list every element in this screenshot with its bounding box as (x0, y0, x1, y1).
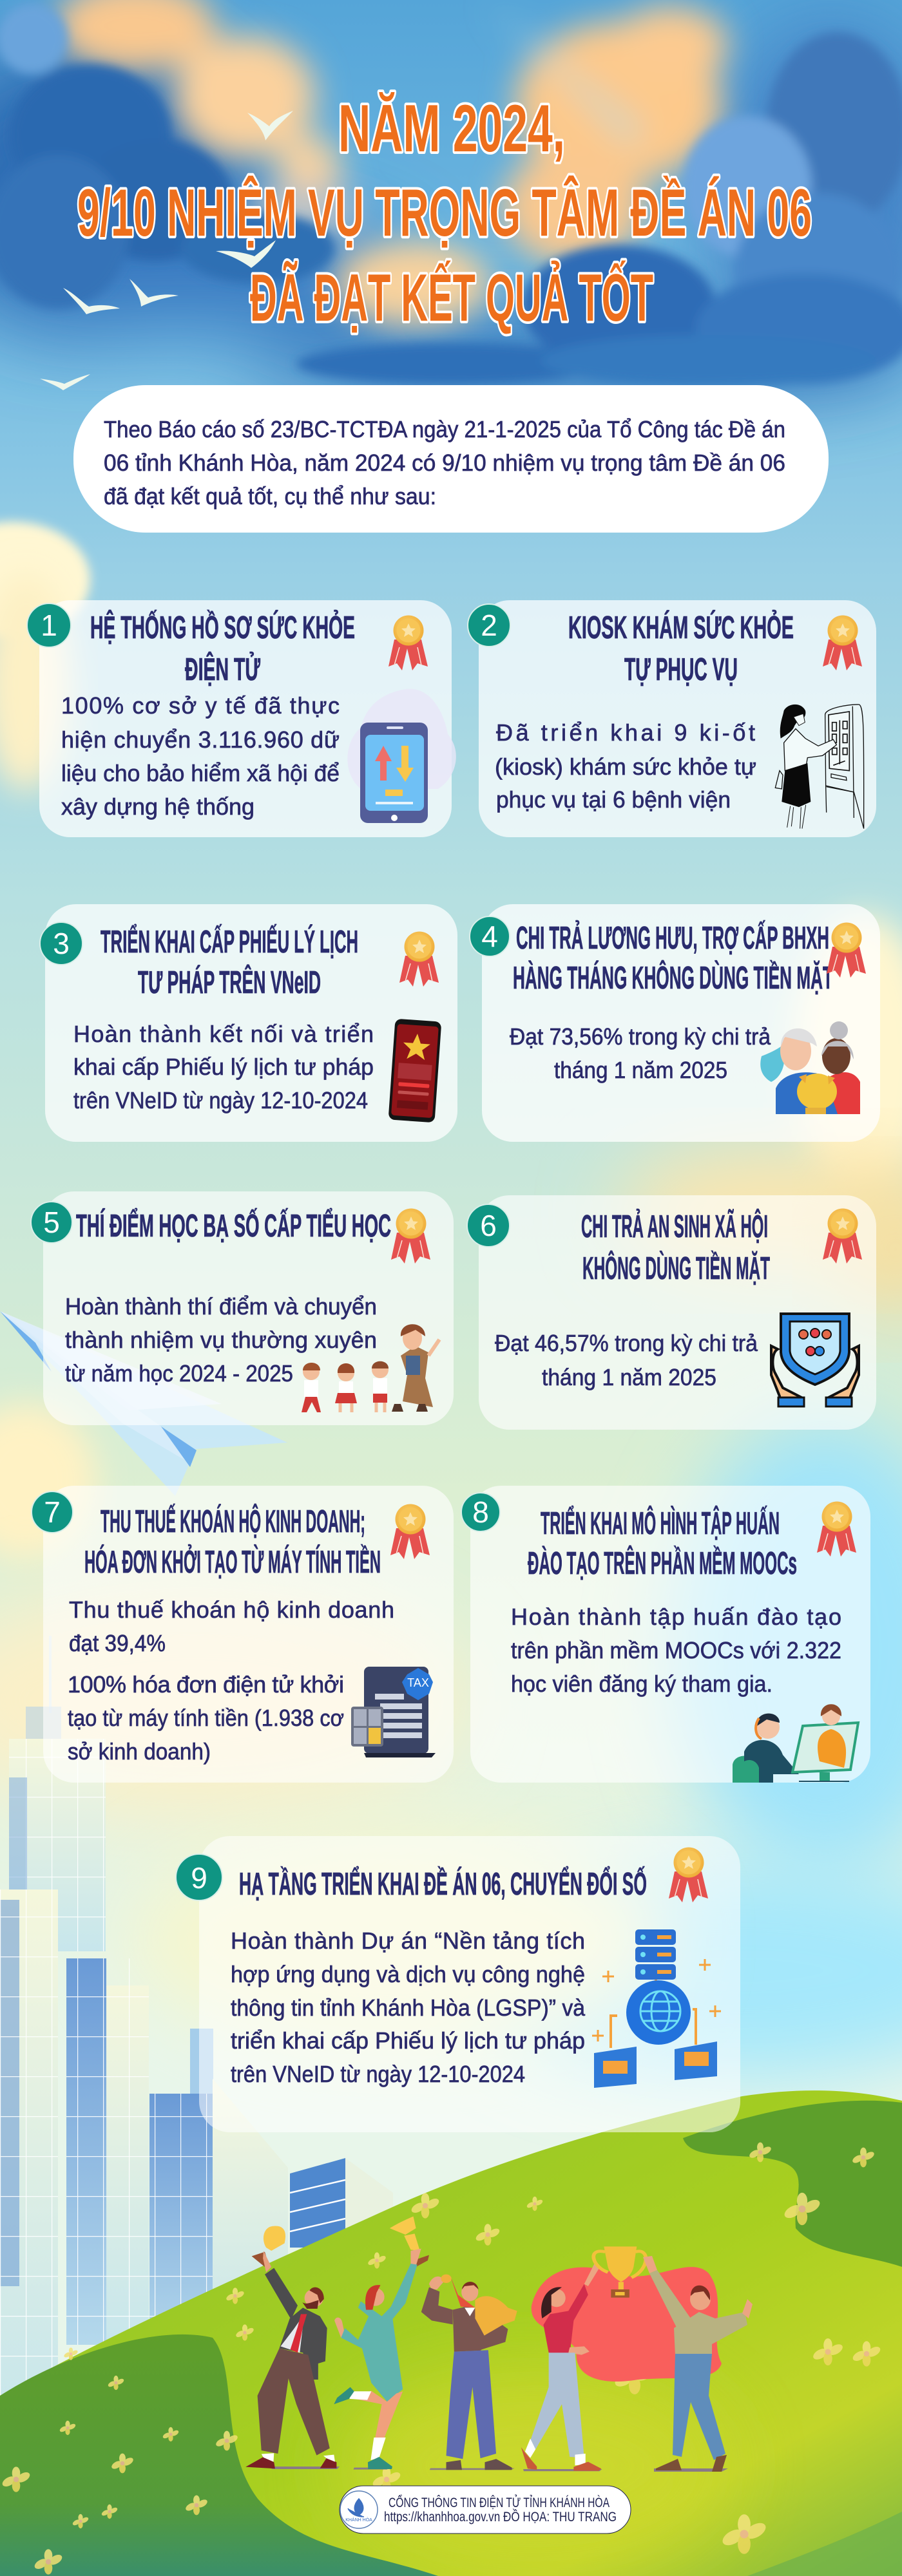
person 2: woman in teal hoodie (334, 2217, 429, 2470)
body text 5: từ năm học 2024 - 2025 (65, 1360, 293, 1387)
background: glass skyscrapers (0, 1636, 393, 2430)
panel: card 4 (470, 904, 880, 1142)
body text 3 (73, 1021, 374, 1113)
icon: hands protecting people in shield (771, 1314, 859, 1406)
body text 1: 100% cơ sở y tế đã thực (61, 692, 340, 719)
person 3: man with medal and trophy (421, 2275, 517, 2470)
body text 9: hợp ứng dụng và dịch vụ công nghệ (231, 1961, 585, 1987)
medal icon (390, 1504, 430, 1559)
body text 8 (511, 1604, 841, 1697)
badge 5 (31, 1202, 72, 1243)
decoration: paper plane (0, 1311, 287, 1496)
panel: card 1 (27, 600, 456, 837)
body text 7: đạt 39,4% (69, 1630, 166, 1656)
background: lower sky colour washes (0, 522, 902, 2080)
winners: five people holding trophies (245, 2217, 646, 2471)
badge 9: 9 (191, 1861, 207, 1895)
body text 7: 100% hóa đơn điện tử khởi (68, 1671, 344, 1698)
panel: card 7 (32, 1486, 454, 1783)
body text 1 (61, 692, 340, 820)
body text 2 (495, 719, 756, 813)
body text 8: trên phần mềm MOOCs với 2.322 (511, 1637, 841, 1663)
body text 1: liệu cho bảo hiểm xã hội để (61, 760, 340, 786)
panel: card 6 (467, 1195, 876, 1430)
icon: VNeID phone (389, 1019, 441, 1122)
badge 4: 4 (481, 920, 498, 953)
medal icon (669, 1847, 708, 1902)
panel: card 5 (31, 1191, 454, 1425)
heading 1: ĐIỆN TỬ (185, 652, 260, 687)
icon: elderly couple with piggy bank (760, 1021, 860, 1114)
body text 9: thông tin tỉnh Khánh Hòa (LGSP)” và (231, 1994, 586, 2021)
badge 4 (470, 916, 510, 956)
source text (384, 2495, 617, 2524)
panel: card 9 (176, 1836, 740, 2132)
heading 8 (528, 1506, 797, 1581)
body text 4 (510, 1023, 771, 1083)
body text 2: Đã triển khai 9 ki-ốt (496, 719, 755, 746)
badge 3 (40, 922, 82, 965)
medal icon (391, 1208, 430, 1264)
body text 6 (495, 1330, 758, 1390)
footer: source pill (340, 2486, 631, 2533)
background: green hill (0, 2090, 902, 2576)
heading 3 (101, 924, 358, 1000)
badge 5: 5 (43, 1206, 60, 1239)
body text 2: (kiosk) khám sức khỏe tự (495, 753, 756, 780)
medal icon (399, 931, 439, 987)
icon: smartphone with arrows (347, 689, 456, 823)
panel: card 8 (461, 1486, 870, 1783)
body text 7: tạo từ máy tính tiền (1.938 cơ (68, 1705, 344, 1731)
badge 1: 1 (41, 609, 57, 642)
icon: online training (733, 1704, 858, 1783)
body text 9: Hoàn thành Dự án “Nền tảng tích (231, 1927, 585, 1954)
heading 5: THÍ ĐIỂM HỌC BẠ SỐ CẤP TIỂU HỌC (76, 1208, 391, 1244)
body text 1: xây dựng hệ thống (61, 793, 254, 820)
person 1: man in suit with trophy (245, 2226, 340, 2469)
body text 7 (68, 1596, 394, 1765)
icon: teacher and pupils (302, 1324, 439, 1412)
big gold trophy (593, 2246, 646, 2298)
body text 4: Đạt 73,56% trong kỳ chi trả (510, 1023, 771, 1050)
intro paragraph: 06 tỉnh Khánh Hòa, năm 2024 có 9/10 nhiệm vụ trọng tâm Đề án 06 (104, 450, 785, 476)
medal icon (389, 616, 428, 670)
panel: card 7: HÓA ĐƠN KHỞI TẠO TỪ MÁY TÍNH TIỀN (84, 1544, 381, 1580)
intro paragraph (104, 416, 785, 509)
badge 1 (27, 603, 71, 647)
badge 7 (32, 1492, 73, 1533)
icon: server and globe network (592, 1929, 721, 2088)
heading 4 (513, 920, 833, 996)
decoration: five white birds (40, 111, 293, 390)
body text 5: thành nhiệm vụ thường xuyên (65, 1327, 377, 1353)
body text 1: hiện chuyển 3.116.960 dữ (61, 726, 340, 753)
body text 5 (65, 1293, 377, 1387)
body text 7: sở kinh doanh) (68, 1738, 211, 1765)
badge 9 (176, 1854, 222, 1900)
intro paragraph: đã đạt kết quả tốt, cụ thể như sau: (104, 483, 436, 509)
red splash behind winners (532, 2267, 722, 2382)
source text: CỔNG THÔNG TIN ĐIỆN TỬ TỈNH KHÁNH HÒA (389, 2495, 609, 2510)
heading 7 (84, 1504, 381, 1580)
medal icon (827, 922, 866, 978)
panel: card 2 (468, 600, 876, 837)
medal icon (823, 616, 862, 670)
body text 6: tháng 1 năm 2025 (542, 1364, 716, 1390)
background: clouds at the top (0, 0, 902, 399)
source text: https://khanhhoa.gov.vn ĐỒ HỌA: THU TRANG (384, 2509, 617, 2524)
badge 2: 2 (481, 609, 497, 642)
body text 3: khai cấp Phiếu lý lịch tư pháp (73, 1054, 374, 1080)
body text 9 (231, 1927, 586, 2087)
heading 3: TRIỂN KHAI CẤP PHIẾU LÝ LỊCH (101, 924, 358, 960)
heading 2 (568, 610, 794, 687)
panel: card 3 (40, 904, 457, 1142)
body text 7: Thu thuế khoán hộ kinh doanh (69, 1596, 394, 1623)
person 4: woman in red top (521, 2260, 602, 2471)
logo: KHÁNH HÒA (345, 2517, 372, 2523)
title: NĂM 2024, (338, 91, 565, 166)
badge 6 (467, 1204, 510, 1247)
panel: card 7: THU THUẾ KHOÁN HỘ KINH DOANH; (101, 1504, 365, 1539)
heading 1 (90, 610, 355, 687)
logo (340, 2491, 378, 2528)
icon: tax document: TAX (407, 1676, 429, 1689)
body text 6: Đạt 46,57% trong kỳ chi trả (495, 1330, 758, 1356)
decoration: scattered yellow flowers (1, 2143, 882, 2575)
icon: woman using kiosk (775, 705, 864, 829)
body text 8: Hoàn thành tập huấn đào tạo (511, 1604, 841, 1630)
badge 2 (468, 604, 510, 647)
badge 8: 8 (472, 1495, 489, 1529)
heading 1: HỆ THỐNG HỒ SƠ SỨC KHỎE (90, 610, 355, 645)
body text 8: học viên đăng ký tham gia. (511, 1671, 772, 1697)
person 5: man in khaki hoodie (643, 2256, 753, 2472)
icon: tax document (351, 1667, 436, 1757)
heading 3: TƯ PHÁP TRÊN VNeID (138, 965, 321, 1000)
body text 2: phục vụ tại 6 bệnh viện (496, 786, 731, 813)
heading 2: TỰ PHỤC VỤ (624, 652, 738, 687)
medal icon (823, 1208, 862, 1264)
body text 9: triển khai cấp Phiếu lý lịch tư pháp (231, 2027, 585, 2054)
title (77, 91, 812, 336)
badge 7: 7 (44, 1495, 61, 1529)
intro paragraph: Theo Báo cáo số 23/BC-TCTĐA ngày 21-1-2025 của Tổ Công tác Đề án (104, 416, 785, 442)
body text 4: tháng 1 năm 2025 (554, 1057, 727, 1083)
badge 3: 3 (53, 927, 70, 960)
body text 3: Hoàn thành kết nối và triển (73, 1021, 374, 1047)
body text 5: Hoàn thành thí điểm và chuyển (65, 1293, 377, 1320)
panel: intro text (73, 385, 829, 533)
body text 9: trên VNeID từ ngày 12-10-2024 (231, 2061, 525, 2087)
heading 6 (581, 1209, 770, 1286)
badge 8 (461, 1493, 500, 1531)
body text 3: trên VNeID từ ngày 12-10-2024 (73, 1087, 368, 1113)
medal icon (817, 1502, 856, 1557)
badge 6: 6 (480, 1209, 497, 1242)
